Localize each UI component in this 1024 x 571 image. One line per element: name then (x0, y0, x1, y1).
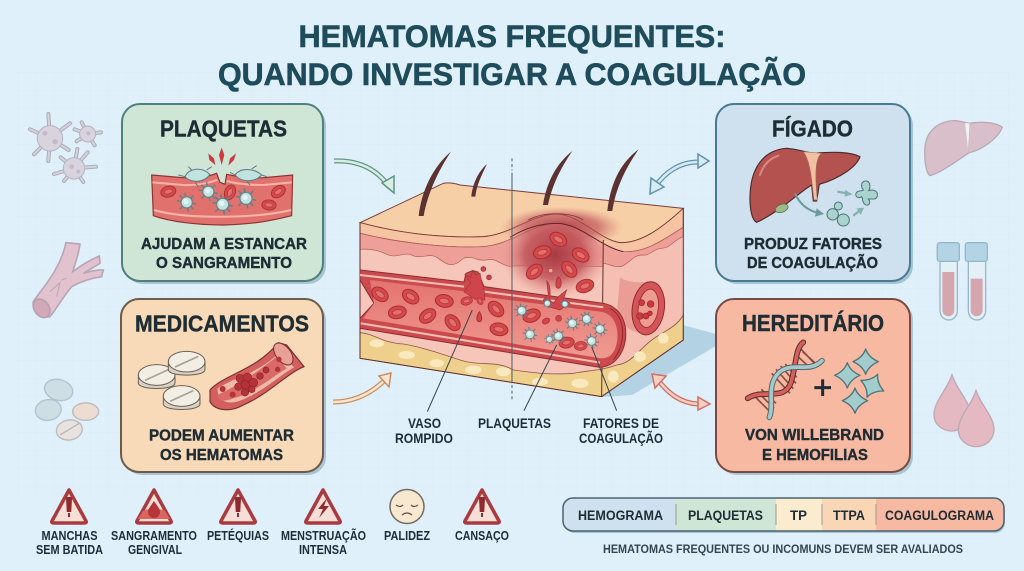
exam: tp: TP (790, 508, 807, 523)
text: plaquetas description: AJUDAM A ESTANCAR (141, 236, 307, 253)
label: plaquetas: PLAQUETAS (478, 416, 551, 431)
text: hereditario description: E HEMOFILIAS (762, 447, 868, 464)
red blood cells (369, 229, 596, 351)
panel: figado (716, 104, 913, 284)
text: medicamentos description: PODEM AUMENTAR (149, 428, 294, 444)
label: fatores de coagulacao: COAGULAÇÃO (579, 431, 663, 446)
label: vaso rompido: ROMPIDO (395, 431, 453, 446)
decoration: right liver (925, 121, 1002, 176)
symptom: menstruacao intensa: MENSTRUAÇÃO (281, 528, 366, 543)
label: fatores de coagulacao: FATORES DE (583, 416, 659, 431)
text: medicamentos description (149, 428, 294, 464)
icon: pills and vessel (138, 339, 304, 410)
icon: ruptured vessel with platelets (152, 148, 293, 225)
vessel rupture and blood (464, 271, 485, 300)
symptom: petequias (207, 490, 269, 543)
footer note: HEMATOMAS FREQUENTES OU INCOMUNS DEVEM SER AVALIADOS (603, 544, 963, 556)
text: plaquetas description: O SANGRAMENTO (156, 255, 292, 272)
symptom: manchas sem batida: MANCHAS (42, 529, 98, 543)
exam: coagulograma: COAGULOGRAMA (885, 508, 994, 523)
hematoma (500, 207, 623, 248)
central skin cross-section (360, 149, 683, 412)
symptom: cansaco: CANSAÇO (455, 529, 509, 543)
text: figado description (744, 236, 882, 272)
icon: liver and clotting factors (750, 148, 877, 226)
arrow: medicamentos to skin (333, 373, 391, 402)
text: figado description: DE COAGULAÇÃO (747, 254, 878, 272)
title: HEMATOMAS FREQUENTES: (298, 18, 726, 54)
decoration: left pills (34, 376, 99, 442)
main vessel (360, 270, 626, 367)
arrow: figado to skin (650, 154, 709, 194)
skin surface (360, 183, 683, 243)
symptom: sangramento gengival: GENGIVAL (128, 543, 182, 557)
divider line (510, 158, 513, 400)
symptom: palidez: PALIDEZ (384, 529, 430, 543)
icon: dna and clotting factors (748, 342, 889, 417)
heading: hereditario: HEREDITÁRIO (742, 309, 884, 336)
heading: medicamentos: MEDICAMENTOS (135, 310, 309, 336)
text: plaquetas description (141, 236, 307, 272)
side vessel section (617, 277, 648, 335)
text: figado description: PRODUZ FATORES (744, 236, 882, 253)
arrow: plaquetas to skin (334, 161, 394, 193)
title: QUANDO INVESTIGAR A COAGULAÇÃO (218, 56, 806, 92)
decoration: left platelets (30, 114, 101, 182)
heading: plaquetas: PLAQUETAS (160, 116, 287, 142)
symptom: sangramento gengival: SANGRAMENTO (111, 529, 197, 543)
symptom: sangramento gengival (111, 490, 197, 557)
exam: hemograma: HEMOGRAMA (578, 508, 663, 523)
hairs (419, 149, 639, 216)
panel: hereditario (716, 299, 913, 475)
label: fatores de coagulacao (579, 416, 663, 446)
label: vaso rompido: VASO (408, 416, 441, 431)
panel: medicamentos (121, 299, 326, 475)
heading: figado: FÍGADO (772, 114, 853, 142)
skin block shadow (602, 325, 716, 397)
decoration: right test tubes (937, 243, 987, 320)
symptom: petequias: PETÉQUIAS (207, 528, 269, 543)
symptom: menstruacao intensa: INTENSA (299, 543, 347, 557)
symptom: cansaco (455, 490, 509, 543)
exam: ttpa: TTPA (833, 508, 865, 523)
symptom: palidez (384, 490, 430, 543)
exams bar (563, 498, 1005, 533)
exam: plaquetas: PLAQUETAS (688, 508, 763, 523)
symptom: menstruacao intensa (281, 490, 366, 557)
panel: plaquetas (122, 104, 326, 284)
label: vaso rompido (395, 416, 453, 446)
symptom: manchas sem batida (36, 490, 103, 557)
platelets (514, 298, 607, 348)
arrow: hereditario to skin (652, 374, 710, 410)
leader lines (427, 310, 617, 412)
fat layer (360, 315, 683, 397)
text: medicamentos description: OS HEMATOMAS (160, 447, 283, 464)
text: hereditario description (745, 427, 884, 464)
symptom: manchas sem batida: SEM BATIDA (36, 543, 103, 557)
decoration: right blood drops (934, 375, 994, 447)
decoration: left blood vessel (30, 243, 103, 321)
text: hereditario description: VON WILLEBRAND (745, 427, 884, 444)
title (218, 18, 806, 92)
